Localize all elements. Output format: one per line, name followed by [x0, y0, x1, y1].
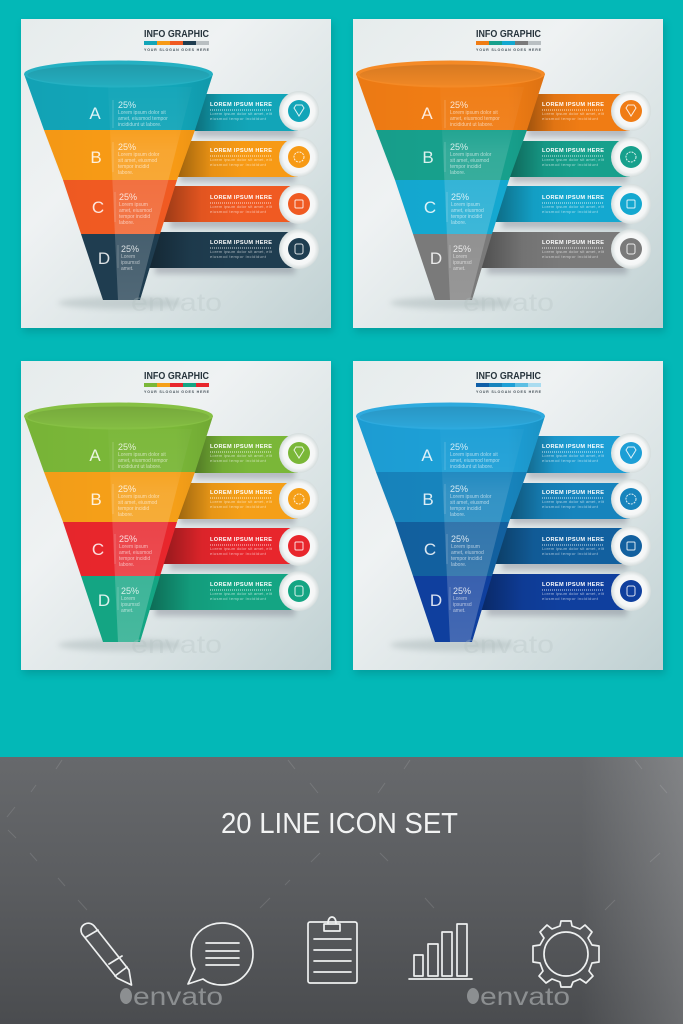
band labels: B — [422, 148, 434, 167]
watermark: envato — [131, 631, 222, 659]
band labels: labore. — [118, 512, 133, 518]
band labels: amet, eiusmod — [119, 208, 152, 214]
ribbon C — [160, 528, 298, 570]
icon: speech bubble — [188, 923, 253, 985]
band labels: tempor incidid — [450, 506, 481, 512]
band labels: incididunt ut labore. — [118, 122, 161, 128]
panel: teal and orange funnel — [21, 19, 333, 332]
band labels: Lorem ipsum dolor — [450, 152, 492, 158]
icon: clipboard — [308, 917, 357, 983]
heading — [476, 371, 542, 394]
band labels: Lorem ipsum dolor — [118, 494, 160, 500]
ribbon B — [507, 141, 630, 182]
band labels: labore. — [451, 562, 466, 568]
watermark: envato — [463, 289, 554, 317]
ribbon D: LOREM IPSUM HERE — [210, 582, 272, 588]
band labels: C — [92, 540, 104, 559]
watermark: envato — [463, 631, 554, 659]
band labels: amet, eiusmod tempor — [118, 116, 168, 122]
ribbon D — [145, 574, 298, 616]
ribbon A — [190, 436, 298, 479]
band labels: tempor incidid — [451, 556, 482, 562]
band labels: tempor incidid — [118, 506, 149, 512]
ribbon D: Lorem ipsum dolor sit amet, elit — [210, 591, 273, 596]
band labels: amet. — [121, 608, 134, 614]
band labels: Lorem ipsum — [119, 202, 148, 208]
ribbon B: LOREM IPSUM HERE — [542, 148, 604, 154]
band labels: A — [421, 104, 433, 123]
panel: orange and teal funnel — [353, 19, 665, 332]
ribbon C: LOREM IPSUM HERE — [210, 195, 272, 201]
heading: YOUR SLOGAN GOES HERE — [144, 390, 210, 394]
band labels: labore. — [451, 220, 466, 226]
ribbon C: Lorem ipsum dolor sit amet, elit — [210, 204, 273, 209]
heading: YOUR SLOGAN GOES HERE — [476, 48, 542, 52]
funnel — [356, 60, 545, 300]
ribbon C: eiusmod tempor incididunt — [210, 209, 267, 214]
watermark left drop — [120, 988, 132, 1004]
band labels: A — [421, 446, 433, 465]
band labels: labore. — [119, 220, 134, 226]
heading — [144, 29, 210, 52]
band labels: amet. — [453, 608, 466, 614]
heading: INFO GRAPHIC — [144, 29, 209, 40]
ribbon A: Lorem ipsum dolor sit amet, elit — [542, 111, 605, 116]
band labels: tempor incidid — [119, 214, 150, 220]
band labels: incididunt ut labore. — [450, 122, 493, 128]
band labels: ipsumsd — [121, 602, 140, 608]
ribbon C: LOREM IPSUM HERE — [542, 195, 604, 201]
ribbon C: eiusmod tempor incididunt — [210, 551, 267, 556]
ribbon D: eiusmod tempor incididunt — [542, 254, 599, 259]
ribbon C — [160, 186, 298, 228]
band labels: 25% — [118, 100, 136, 110]
ribbon A — [522, 94, 630, 137]
band labels: Lorem ipsum — [451, 202, 480, 208]
ribbon C: LOREM IPSUM HERE — [542, 537, 604, 543]
ribbon A: LOREM IPSUM HERE — [542, 444, 604, 450]
panel: blue funnel — [353, 361, 665, 674]
band labels: D — [430, 591, 442, 610]
ribbon D: LOREM IPSUM HERE — [542, 240, 604, 246]
panel: grey icon set — [0, 757, 683, 1024]
ribbon B — [507, 483, 630, 524]
ribbon D: Lorem ipsum dolor sit amet, elit — [542, 591, 605, 596]
watermark left: envato — [133, 983, 223, 1011]
ribbon C: Lorem ipsum dolor sit amet, elit — [542, 204, 605, 209]
ribbon B — [175, 141, 298, 182]
band labels: labore. — [450, 512, 465, 518]
band labels: amet. — [121, 266, 134, 272]
band labels: Lorem — [121, 596, 135, 602]
panel: green funnel — [21, 361, 333, 674]
band labels: ipsumsd — [121, 260, 140, 266]
band labels: C — [424, 540, 436, 559]
band labels: Lorem ipsum dolor sit — [118, 452, 166, 458]
band labels: amet, eiusmod — [451, 208, 484, 214]
ribbon D — [477, 574, 630, 616]
ribbon B: LOREM IPSUM HERE — [542, 490, 604, 496]
ribbon C: eiusmod tempor incididunt — [542, 209, 599, 214]
band labels: 25% — [121, 586, 139, 596]
ribbon A: eiusmod tempor incididunt — [542, 116, 599, 121]
ribbon B: eiusmod tempor incididunt — [210, 504, 267, 509]
ribbon D — [145, 232, 298, 274]
ribbon A: Lorem ipsum dolor sit amet, elit — [210, 453, 273, 458]
ribbon B: Lorem ipsum dolor sit amet, elit — [210, 157, 273, 162]
card background — [353, 19, 663, 328]
band labels: amet, eiusmod — [451, 550, 484, 556]
icon: bar chart — [409, 924, 472, 979]
ribbon A: LOREM IPSUM HERE — [210, 102, 272, 108]
heading — [476, 29, 542, 52]
band labels: Lorem ipsum — [119, 544, 148, 550]
band labels: amet. — [453, 266, 466, 272]
band labels: sit amet, eiusmod — [450, 158, 489, 164]
band labels: A — [89, 104, 101, 123]
funnel — [24, 60, 213, 300]
ribbon B: Lorem ipsum dolor sit amet, elit — [542, 157, 605, 162]
band labels: ipsumsd — [453, 602, 472, 608]
ribbon A: LOREM IPSUM HERE — [542, 102, 604, 108]
band labels: Lorem ipsum dolor — [118, 152, 160, 158]
band labels: amet, eiusmod tempor — [450, 116, 500, 122]
heading: YOUR SLOGAN GOES HERE — [476, 390, 542, 394]
band labels: D — [430, 249, 442, 268]
band labels: 25% — [451, 192, 469, 202]
band labels: Lorem — [121, 254, 135, 260]
ribbon A — [522, 436, 630, 479]
ribbon B: Lorem ipsum dolor sit amet, elit — [210, 499, 273, 504]
watermark: envato — [131, 289, 222, 317]
ribbon D — [477, 232, 630, 274]
band labels: C — [92, 198, 104, 217]
funnel — [356, 402, 545, 642]
ribbon D: LOREM IPSUM HERE — [210, 240, 272, 246]
band labels: incididunt ut labore. — [118, 464, 161, 470]
ribbon B — [175, 483, 298, 524]
watermark right: envato — [480, 983, 570, 1011]
band labels: tempor incidid — [118, 164, 149, 170]
band labels: 25% — [118, 484, 136, 494]
band labels: B — [90, 148, 102, 167]
band labels: 25% — [450, 100, 468, 110]
ribbon B: eiusmod tempor incididunt — [542, 162, 599, 167]
icon badges — [279, 433, 319, 611]
icon badges — [611, 91, 651, 269]
band labels: Lorem — [453, 254, 467, 260]
card background — [21, 361, 331, 670]
band labels: tempor incidid — [119, 556, 150, 562]
ribbon B: LOREM IPSUM HERE — [210, 490, 272, 496]
band labels: C — [424, 198, 436, 217]
ribbon B: LOREM IPSUM HERE — [210, 148, 272, 154]
heading: INFO GRAPHIC — [144, 371, 209, 382]
ribbon D: eiusmod tempor incididunt — [210, 596, 267, 601]
band labels: labore. — [118, 170, 133, 176]
band labels: 25% — [118, 142, 136, 152]
band labels: D — [98, 591, 110, 610]
band labels: amet, eiusmod — [119, 550, 152, 556]
band labels: B — [422, 490, 434, 509]
ribbon A: eiusmod tempor incididunt — [210, 458, 267, 463]
ribbon A: Lorem ipsum dolor sit amet, elit — [210, 111, 273, 116]
band labels: 25% — [121, 244, 139, 254]
band labels — [421, 100, 500, 272]
band labels: Lorem — [453, 596, 467, 602]
ribbon A: eiusmod tempor incididunt — [210, 116, 267, 121]
ribbon D: LOREM IPSUM HERE — [542, 582, 604, 588]
band labels: Lorem ipsum — [451, 544, 480, 550]
band labels: Lorem ipsum dolor sit — [450, 110, 498, 116]
band labels — [421, 442, 500, 614]
card background — [21, 19, 331, 328]
ribbon A: Lorem ipsum dolor sit amet, elit — [542, 453, 605, 458]
band labels: Lorem ipsum dolor sit — [118, 110, 166, 116]
band labels: incididunt ut labore. — [450, 464, 493, 470]
band labels: sit amet, eiusmod — [450, 500, 489, 506]
band labels — [89, 100, 168, 272]
ribbon B: eiusmod tempor incididunt — [210, 162, 267, 167]
band labels: tempor incidid — [451, 214, 482, 220]
band labels: tempor incidid — [450, 164, 481, 170]
band labels: labore. — [450, 170, 465, 176]
band labels: B — [90, 490, 102, 509]
band labels: ipsumsd — [453, 260, 472, 266]
ribbon C: Lorem ipsum dolor sit amet, elit — [542, 546, 605, 551]
heading: YOUR SLOGAN GOES HERE — [144, 48, 210, 52]
band labels: 25% — [119, 192, 137, 202]
ribbon C — [492, 528, 630, 570]
band labels: 25% — [119, 534, 137, 544]
heading: 20 LINE ICON SET — [221, 808, 458, 840]
icon badges — [279, 91, 319, 269]
band labels: 25% — [451, 534, 469, 544]
ribbon D: Lorem ipsum dolor sit amet, elit — [210, 249, 273, 254]
ribbon B: eiusmod tempor incididunt — [542, 504, 599, 509]
band labels: Lorem ipsum dolor sit — [450, 452, 498, 458]
band labels: 25% — [118, 442, 136, 452]
ribbon A — [190, 94, 298, 137]
ribbon C: LOREM IPSUM HERE — [210, 537, 272, 543]
ribbon A: eiusmod tempor incididunt — [542, 458, 599, 463]
ribbon A: LOREM IPSUM HERE — [210, 444, 272, 450]
band labels: amet, eiusmod tempor — [450, 458, 500, 464]
heading: INFO GRAPHIC — [476, 29, 541, 40]
ribbon D: Lorem ipsum dolor sit amet, elit — [542, 249, 605, 254]
band labels: 25% — [453, 586, 471, 596]
icon badges — [611, 433, 651, 611]
band labels: D — [98, 249, 110, 268]
band labels: sit amet, eiusmod — [118, 158, 157, 164]
band labels: sit amet, eiusmod — [118, 500, 157, 506]
band labels: amet, eiusmod tempor — [118, 458, 168, 464]
band labels: 25% — [450, 442, 468, 452]
band labels: labore. — [119, 562, 134, 568]
ribbon B: Lorem ipsum dolor sit amet, elit — [542, 499, 605, 504]
band labels: Lorem ipsum dolor — [450, 494, 492, 500]
ribbon C: eiusmod tempor incididunt — [542, 551, 599, 556]
band labels: A — [89, 446, 101, 465]
ribbon D: eiusmod tempor incididunt — [210, 254, 267, 259]
ribbon C — [492, 186, 630, 228]
band labels: 25% — [450, 142, 468, 152]
band labels: 25% — [453, 244, 471, 254]
icon: gear — [533, 921, 599, 987]
heading: INFO GRAPHIC — [476, 371, 541, 382]
ribbon D: eiusmod tempor incididunt — [542, 596, 599, 601]
watermark right drop — [467, 988, 479, 1004]
funnel — [24, 402, 213, 642]
heading — [144, 371, 210, 394]
band labels — [89, 442, 168, 614]
band labels: 25% — [450, 484, 468, 494]
teal background — [0, 0, 683, 757]
ribbon C: Lorem ipsum dolor sit amet, elit — [210, 546, 273, 551]
icon: pencil — [81, 923, 132, 985]
card background — [353, 361, 663, 670]
